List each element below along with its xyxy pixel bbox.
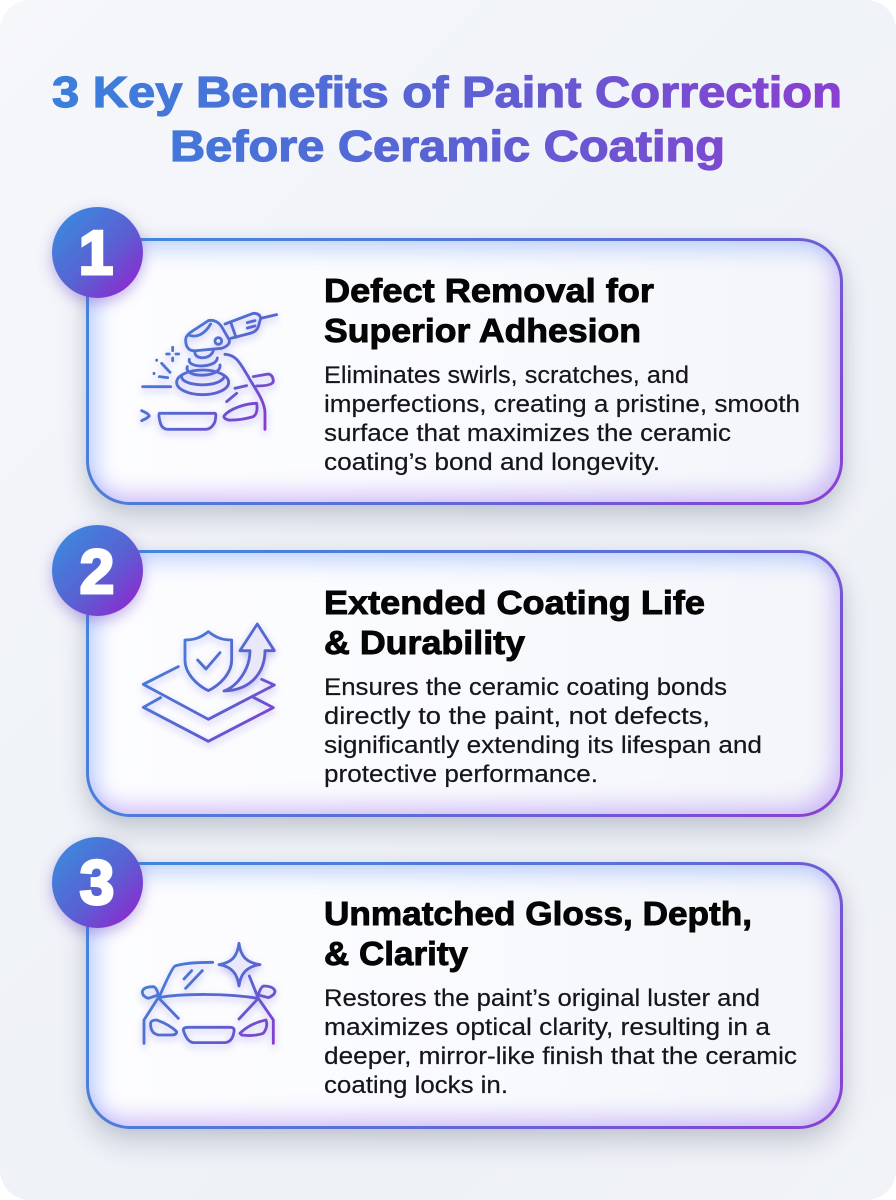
body text: maximizes optical clarity, resulting in a bbox=[324, 1014, 770, 1041]
card frame bbox=[86, 862, 843, 1129]
card frame bbox=[86, 550, 843, 817]
number 2: 2 bbox=[80, 538, 114, 607]
heading: Superior Adhesion bbox=[324, 312, 641, 349]
number badge 2 bbox=[52, 525, 143, 616]
body text: Ensures the ceramic coating bonds bbox=[324, 674, 727, 701]
icon: car with sparkle bbox=[138, 942, 279, 1051]
icon: orbital polisher on car bbox=[139, 312, 278, 438]
panel: unmatched gloss bbox=[44, 834, 854, 1154]
heading: Unmatched Gloss, Depth, bbox=[324, 895, 752, 932]
body text: protective performance. bbox=[324, 761, 598, 788]
heading bbox=[324, 584, 705, 662]
body text bbox=[324, 985, 797, 1099]
body text bbox=[324, 362, 800, 476]
number 3: 3 bbox=[80, 849, 114, 918]
panel: extended coating life bbox=[44, 522, 854, 842]
body text: coating’s bond and longevity. bbox=[324, 449, 660, 476]
heading: Extended Coating Life bbox=[324, 584, 705, 621]
body text: imperfections, creating a pristine, smooth bbox=[324, 391, 800, 418]
number badge 1 bbox=[52, 207, 143, 298]
heading: & Clarity bbox=[324, 935, 469, 972]
body text: surface that maximizes the ceramic bbox=[324, 420, 731, 447]
number 1: 1 bbox=[79, 219, 113, 288]
body text: Restores the paint’s original luster and bbox=[324, 985, 760, 1012]
title bbox=[52, 68, 842, 171]
body text: Eliminates swirls, scratches, and bbox=[324, 362, 689, 389]
panel: defect removal bbox=[44, 204, 854, 530]
body text: coating locks in. bbox=[324, 1072, 508, 1099]
title: 3 Key Benefits of Paint Correction bbox=[52, 68, 842, 117]
body text: directly to the paint, not defects, bbox=[324, 703, 710, 730]
heading: Defect Removal for bbox=[324, 272, 654, 309]
heading bbox=[324, 272, 654, 350]
heading: & Durability bbox=[324, 624, 526, 661]
number badge 3 bbox=[52, 837, 143, 928]
body text bbox=[324, 674, 762, 788]
body text: significantly extending its lifespan and bbox=[324, 732, 762, 759]
icon: shield, layers and arrow bbox=[140, 622, 278, 749]
body text: deeper, mirror-like finish that the ceramic bbox=[324, 1043, 797, 1070]
card frame bbox=[86, 238, 843, 505]
title: Before Ceramic Coating bbox=[170, 122, 725, 171]
heading bbox=[324, 895, 752, 972]
